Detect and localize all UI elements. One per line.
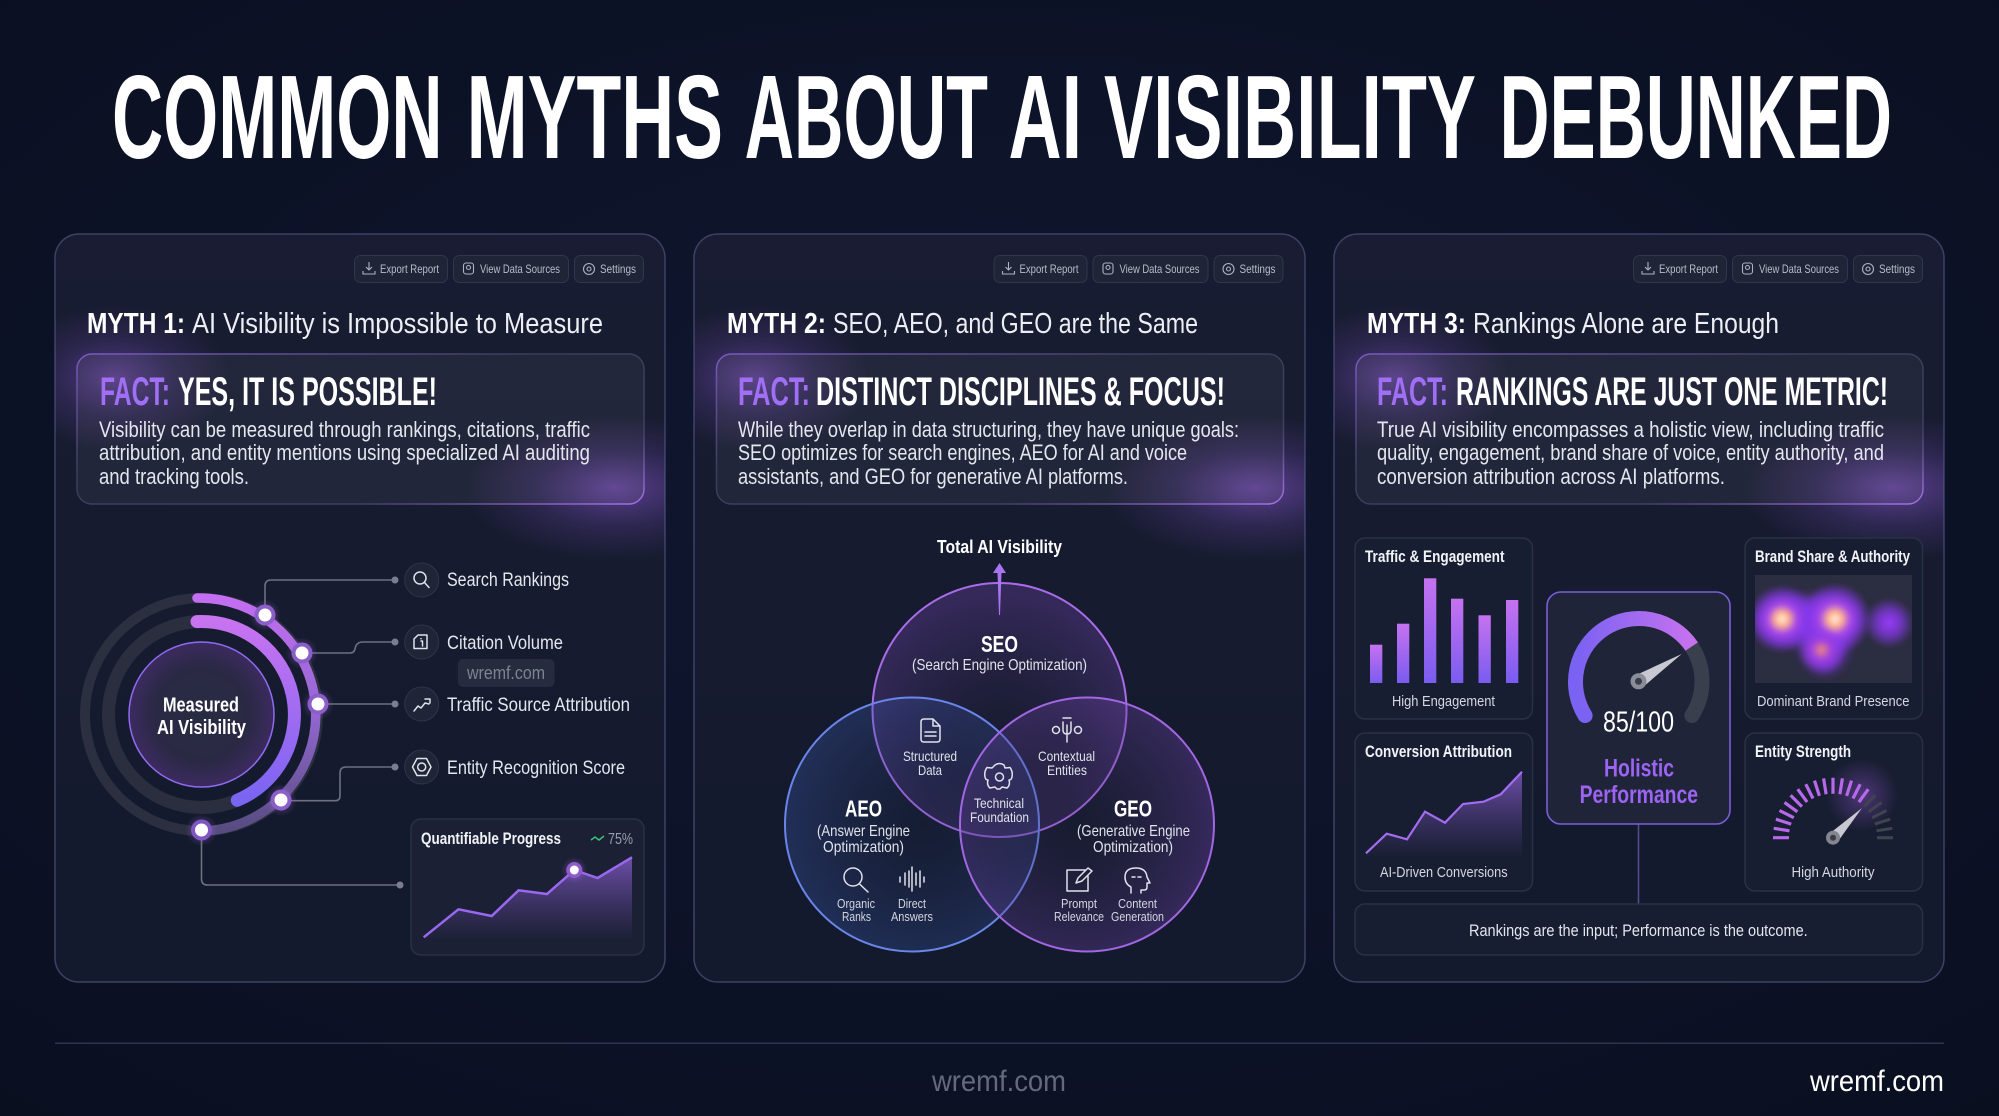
GEO label: GEO — [1114, 796, 1152, 822]
content generation: Content — [1118, 896, 1157, 911]
watermark pill: wremf.com — [466, 663, 545, 683]
prompt relevance — [1054, 868, 1104, 924]
card: entity strength — [1745, 733, 1922, 891]
toolbar buttons: View Data Sources — [480, 262, 560, 276]
AEO label — [817, 796, 910, 856]
technical foundation: Foundation — [970, 809, 1029, 825]
panel: myth 3 — [1333, 233, 1945, 983]
toolbar buttons — [354, 256, 644, 282]
myth heading: MYTH 1: — [87, 308, 185, 340]
toolbar buttons: Settings — [1879, 262, 1915, 276]
metric: search rankings — [405, 563, 569, 597]
fact box: conversion attribution across AI platforms. — [1377, 464, 1725, 489]
contextual entities — [1038, 718, 1095, 778]
card: conversion attribution: AI-Driven Conversions — [1380, 864, 1508, 881]
technical foundation — [970, 764, 1029, 825]
fact box — [1356, 354, 1923, 504]
technical foundation: Technical — [974, 795, 1024, 811]
title: VISIBILITY — [1104, 51, 1476, 184]
circle: SEO — [872, 583, 1126, 837]
organic ranks: Ranks — [842, 909, 871, 924]
fact box: SEO optimizes for search engines, AEO for AI and voice — [738, 440, 1187, 465]
heatmap — [1748, 575, 1914, 683]
toolbar buttons: View Data Sources — [1759, 262, 1839, 276]
card: traffic and engagement — [1355, 538, 1532, 719]
line chart — [1366, 772, 1522, 858]
bar chart — [1370, 578, 1518, 683]
toolbar buttons — [994, 256, 1283, 282]
myth heading: AI Visibility is Impossible to Measure — [192, 308, 603, 340]
outcome statement bar — [1355, 904, 1922, 955]
card: conversion attribution — [1355, 733, 1532, 891]
toolbar buttons — [1634, 256, 1922, 282]
fact box: quality, engagement, brand share of voice, entity authority, and — [1377, 440, 1884, 465]
footer — [55, 1042, 1944, 1098]
myth heading — [727, 308, 1198, 340]
circle: AEO — [785, 698, 1039, 952]
connector lines — [202, 576, 404, 888]
circle: GEO — [960, 698, 1214, 952]
metric: search rankings: Search Rankings — [447, 570, 569, 591]
tick gauge — [1773, 759, 1898, 845]
label: total AI visibility: Total AI Visibility — [937, 537, 1062, 557]
structured data: Data — [918, 762, 942, 778]
radial ring diagram: Measured — [163, 694, 239, 716]
organic ranks: Organic — [837, 896, 875, 911]
fact box: and tracking tools. — [99, 464, 249, 489]
myth heading: SEO, AEO, and GEO are the Same — [833, 308, 1198, 340]
fact box: FACT: — [100, 370, 170, 414]
myth heading: MYTH 3: — [1367, 308, 1466, 340]
fact box: DISTINCT DISCIPLINES & FOCUS! — [816, 370, 1225, 414]
connector to outcome bar — [1638, 824, 1640, 905]
organic ranks — [837, 868, 875, 924]
AEO label: Optimization) — [823, 839, 904, 856]
metric: entity recognition score — [405, 750, 625, 784]
fact box: FACT: — [738, 370, 810, 414]
myth heading: MYTH 2: — [727, 308, 826, 340]
fact box — [716, 354, 1284, 504]
myth heading — [1367, 308, 1779, 340]
toolbar buttons: Export Report — [1020, 262, 1079, 276]
card: brand share and authority — [1745, 538, 1922, 719]
quantifiable progress chart: Quantifiable Progress — [421, 830, 561, 848]
footer watermark center: wremf.com — [931, 1065, 1066, 1098]
fact box: FACT: — [1377, 370, 1448, 414]
GEO label — [1077, 796, 1190, 856]
SEO label — [912, 631, 1087, 674]
metric: entity recognition score: Entity Recognition Score — [447, 758, 625, 779]
card: holistic performance gauge: Holistic — [1604, 754, 1674, 782]
fact box: attribution, and entity mentions using specialized AI auditing — [99, 440, 590, 465]
fact box: YES, IT IS POSSIBLE! — [178, 370, 437, 414]
direct answers: Direct — [898, 896, 926, 911]
direct answers: Answers — [891, 909, 933, 924]
fact box: Visibility can be measured through rankings, citations, traffic — [99, 417, 590, 442]
card: holistic performance gauge: Performance — [1580, 781, 1698, 809]
title — [112, 51, 1892, 184]
gauge — [1575, 618, 1702, 723]
structured data: Structured — [903, 748, 957, 764]
card: brand share and authority: Dominant Brand Presence — [1757, 693, 1910, 710]
fact box: While they overlap in data structuring, they have unique goals: — [738, 417, 1239, 442]
card: entity strength: High Authority — [1792, 864, 1875, 881]
toolbar buttons: Export Report — [380, 262, 440, 276]
direct answers — [891, 867, 933, 924]
GEO label: Optimization) — [1093, 839, 1173, 856]
myth heading: Rankings Alone are Enough — [1473, 308, 1779, 340]
card: traffic and engagement: Traffic & Engagement — [1365, 548, 1505, 566]
watermark pill — [458, 659, 554, 687]
quantifiable progress chart: 75% — [608, 831, 633, 848]
quantifiable progress chart — [411, 819, 644, 955]
GEO label: (Generative Engine — [1077, 823, 1190, 840]
venn diagram — [785, 537, 1214, 952]
content generation — [1111, 868, 1164, 924]
glowing nodes — [186, 599, 334, 846]
card: brand share and authority: Brand Share & Authority — [1755, 548, 1911, 566]
metric: traffic source attribution — [405, 687, 630, 721]
title: MYTHS — [467, 51, 723, 184]
contextual entities: Entities — [1047, 762, 1087, 778]
fact box: assistants, and GEO for generative AI platforms. — [738, 464, 1128, 489]
title: AI — [1008, 51, 1082, 184]
fact box — [77, 354, 644, 504]
card: entity strength: Entity Strength — [1755, 743, 1851, 761]
title: ABOUT — [745, 51, 988, 184]
panel: myth 1 — [54, 233, 666, 983]
SEO label: (Search Engine Optimization) — [912, 657, 1087, 674]
arrow up — [993, 563, 1006, 615]
card: holistic performance gauge: 85/100 — [1603, 706, 1674, 738]
metric: citation volume: Citation Volume — [447, 633, 563, 654]
footer brand right: wremf.com — [1809, 1065, 1944, 1098]
toolbar buttons: Export Report — [1659, 262, 1719, 276]
radial ring diagram: AI Visibility — [157, 717, 247, 739]
fact box: True AI visibility encompasses a holistic view, including traffic — [1377, 417, 1884, 442]
metric: traffic source attribution: Traffic Source Attribution — [447, 695, 630, 716]
metric: citation volume — [405, 625, 563, 659]
card: traffic and engagement: High Engagement — [1392, 693, 1496, 710]
radial ring diagram — [85, 598, 318, 831]
AEO label: AEO — [845, 796, 882, 822]
card: holistic performance gauge — [1547, 592, 1730, 824]
structured data — [903, 719, 957, 778]
prompt relevance: Prompt — [1061, 896, 1097, 911]
AEO label: (Answer Engine — [817, 823, 910, 840]
prompt relevance: Relevance — [1054, 909, 1104, 924]
panel: myth 2 — [693, 233, 1306, 983]
contextual entities: Contextual — [1038, 748, 1095, 764]
toolbar buttons: Settings — [1240, 262, 1276, 276]
toolbar buttons: View Data Sources — [1120, 262, 1200, 276]
toolbar buttons: Settings — [600, 262, 636, 276]
SEO label: SEO — [981, 631, 1018, 657]
content generation: Generation — [1111, 909, 1164, 924]
card: conversion attribution: Conversion Attribution — [1365, 743, 1512, 761]
outcome statement bar: Rankings are the input; Performance is the outcome. — [1469, 921, 1808, 940]
title: COMMON — [112, 51, 442, 184]
